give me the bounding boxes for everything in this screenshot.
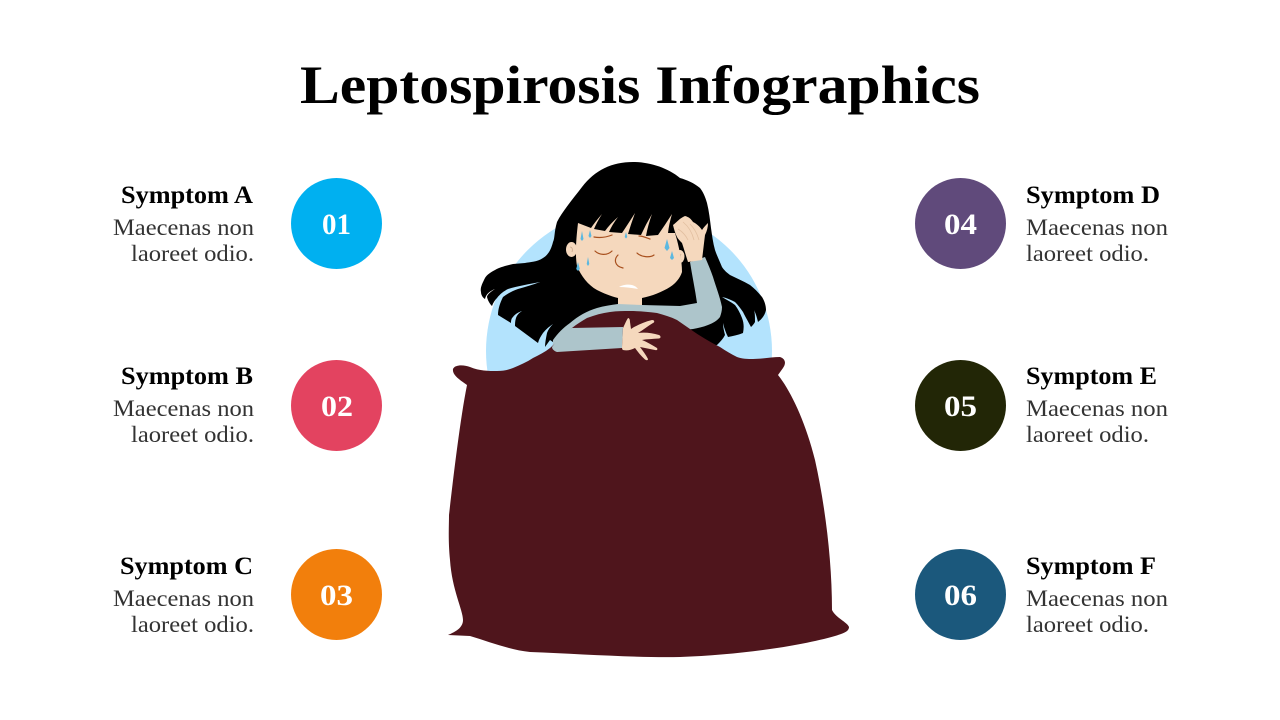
neck [618, 290, 642, 306]
sweat drops [576, 230, 674, 271]
panel: symptom D [915, 178, 1169, 269]
text block: symptom E description: laoreet odio. [1026, 422, 1149, 447]
heading: symptom E: Symptom E [1026, 363, 1157, 390]
ear left [566, 242, 577, 257]
text block: symptom A description: laoreet odio. [131, 241, 254, 266]
sleeve lower arm [552, 327, 623, 352]
badge 03: 03 [320, 579, 353, 612]
panel: symptom C [113, 549, 382, 640]
badge 05: 05 [944, 390, 977, 423]
text block: symptom A description: Maecenas non [113, 215, 255, 240]
text block: symptom B description: laoreet odio. [131, 422, 254, 447]
text block: symptom D description: laoreet odio. [1026, 241, 1149, 266]
badge 02: 02 [321, 390, 353, 423]
sleeve raised arm [552, 257, 722, 347]
badge 01 [291, 178, 382, 269]
badge 04: 04 [944, 208, 977, 241]
hand on forehead [673, 216, 708, 262]
text block: symptom E description [1026, 396, 1169, 447]
text block: symptom D description [1026, 215, 1169, 266]
badge 04 [915, 178, 1006, 269]
panel: symptom B [113, 360, 382, 451]
badge 06: 06 [944, 579, 977, 612]
text block: symptom B description [113, 396, 255, 447]
badge 03 [291, 549, 382, 640]
text block: symptom A description [113, 215, 255, 266]
heading: symptom B: Symptom B [121, 363, 253, 390]
badge 05 [915, 360, 1006, 451]
mouth [619, 285, 638, 289]
badge 02 [291, 360, 382, 451]
brows, closed eyes and nose [594, 235, 654, 268]
text block: symptom F description: laoreet odio. [1026, 612, 1149, 637]
lower hand [622, 318, 660, 360]
text block: symptom C description [113, 586, 255, 637]
text block: symptom B description: Maecenas non [113, 396, 255, 421]
ear right [676, 250, 684, 263]
text block: symptom C description: Maecenas non [113, 586, 255, 611]
heading: symptom A: Symptom A [121, 182, 253, 209]
text block: symptom F description [1026, 586, 1169, 637]
heading: symptom C: Symptom C [120, 553, 253, 580]
text block: symptom F description: Maecenas non [1026, 586, 1169, 611]
badge 06 [915, 549, 1006, 640]
hair [481, 162, 766, 375]
text block: symptom D description: Maecenas non [1026, 215, 1169, 240]
panel: symptom A [113, 178, 382, 269]
text block: symptom C description: laoreet odio. [131, 612, 254, 637]
text block: symptom E description: Maecenas non [1026, 396, 1169, 421]
illustration: sick girl under blanket [448, 162, 849, 657]
badge 01: 01 [322, 208, 351, 241]
blanket [448, 311, 849, 657]
face [576, 213, 682, 299]
panel: symptom E [915, 360, 1169, 451]
blue circle background [486, 208, 772, 494]
heading: symptom F: Symptom F [1026, 553, 1156, 580]
heading: symptom D: Symptom D [1026, 182, 1160, 209]
panel: symptom F [915, 549, 1169, 640]
title: Leptospirosis Infographics [300, 55, 980, 115]
